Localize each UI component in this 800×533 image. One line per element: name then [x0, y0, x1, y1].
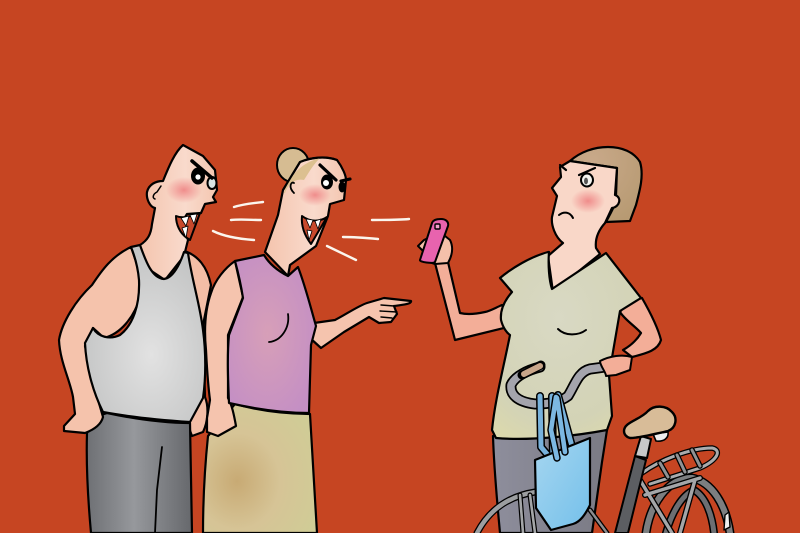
bicycle seat post	[635, 436, 651, 458]
cyclist shirt	[492, 252, 641, 439]
man teeth	[181, 214, 197, 238]
woman purple top	[228, 255, 316, 413]
phone	[420, 219, 448, 263]
woman teeth	[306, 219, 321, 240]
man tank top	[85, 245, 205, 422]
man pants	[87, 413, 192, 533]
bicycle rear wheel and frame	[640, 448, 730, 533]
man cheek	[166, 177, 202, 203]
figure: angry woman	[203, 148, 411, 533]
woman hair	[284, 158, 320, 193]
cyclist hair	[570, 147, 642, 222]
woman ear	[291, 183, 294, 193]
bicycle saddle	[624, 407, 675, 438]
figure: angry man	[59, 145, 217, 533]
cyclist raised arm	[435, 262, 512, 340]
woman skirt	[203, 404, 317, 533]
woman eyes	[320, 165, 350, 192]
bicycle saddle clip	[653, 432, 668, 441]
woman cheek	[299, 184, 331, 206]
woman near arm	[205, 261, 243, 436]
man mouth	[176, 213, 200, 240]
man far arm	[185, 251, 211, 436]
cyclist trousers	[493, 430, 607, 533]
woman bust line	[269, 314, 288, 342]
woman neck and head	[265, 158, 346, 276]
cyclist eye and mouth	[559, 165, 595, 218]
bicycle handlebar	[511, 365, 612, 404]
man eyes	[191, 161, 216, 189]
figure: woman with bicycle	[418, 147, 730, 533]
woman pointing arm	[310, 298, 411, 348]
bicycle front wheel	[477, 492, 607, 533]
bicycle seat tube	[615, 456, 646, 533]
cyclist bust line	[558, 329, 586, 334]
cyclist hand on handlebar	[600, 356, 632, 376]
cyclist neck and face	[548, 161, 619, 292]
man head and neck	[138, 145, 217, 280]
woman bun	[277, 148, 309, 182]
woman fist fingers	[380, 305, 397, 318]
tote bag	[535, 395, 590, 530]
cyclist phone hand	[418, 232, 452, 264]
man arm	[59, 247, 140, 433]
cyclist cheek	[571, 189, 605, 213]
man pants crease	[155, 447, 162, 533]
man ear line	[153, 186, 161, 199]
woman head top outline	[283, 158, 337, 190]
woman mouth	[302, 216, 327, 244]
speech lines: woman	[327, 219, 409, 260]
speech lines: man	[213, 202, 263, 240]
bicycle reflector	[724, 512, 730, 530]
cyclist right arm	[620, 298, 661, 357]
